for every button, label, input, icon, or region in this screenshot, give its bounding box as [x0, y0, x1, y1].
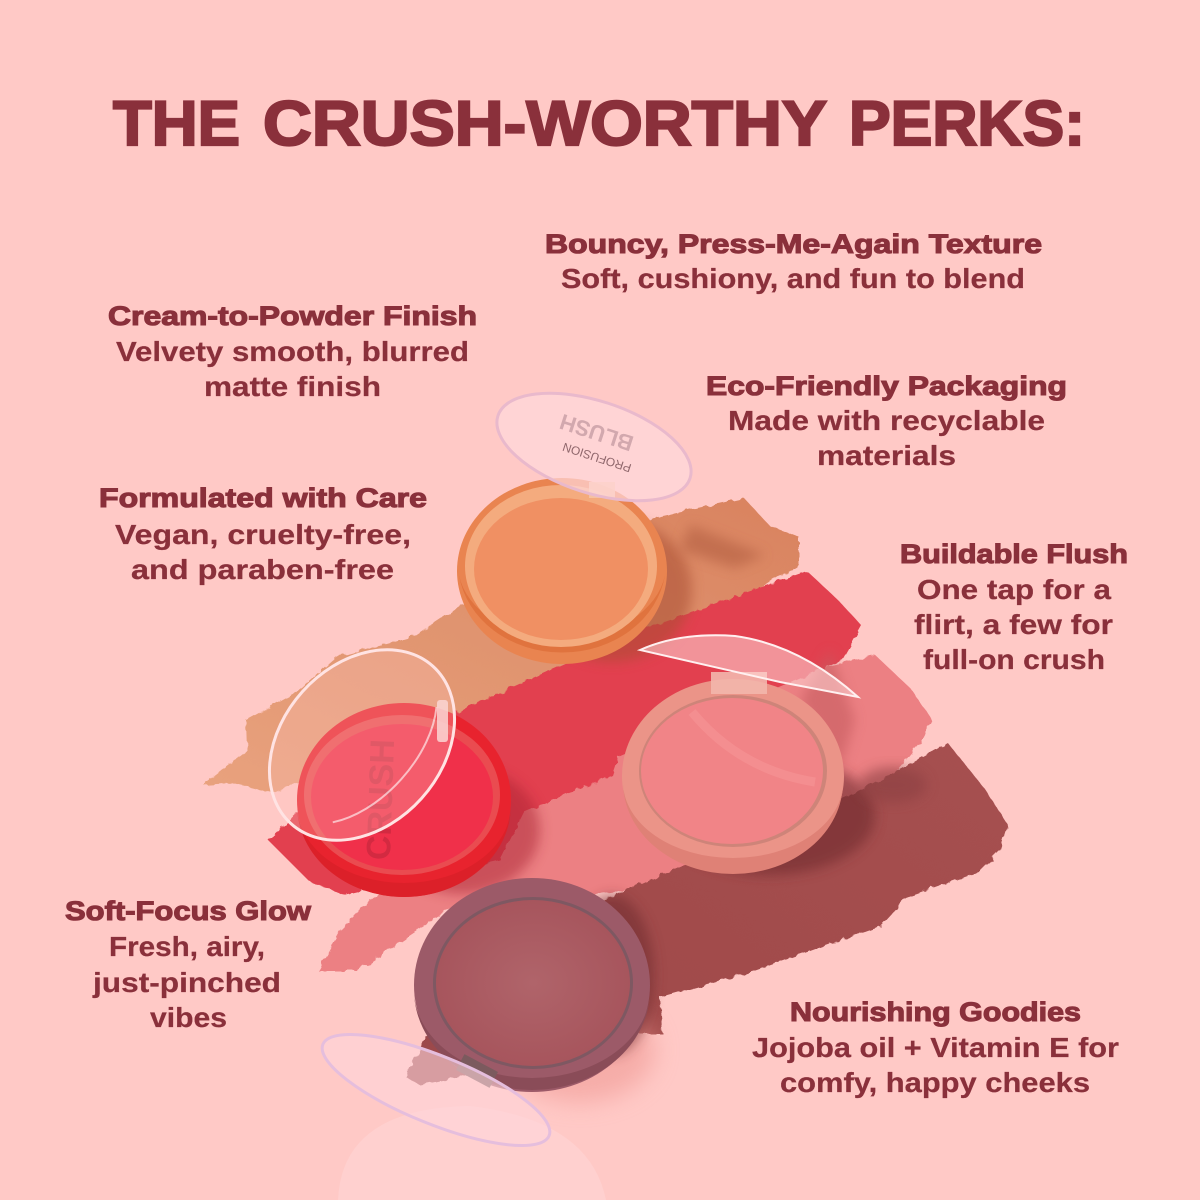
blush pan — [641, 698, 823, 844]
title: CRUSH-WORTHY — [263, 89, 827, 159]
perk: bouncy texture — [545, 229, 1042, 294]
blush pan — [474, 498, 648, 640]
perk: buildable flush: Buildable Flush — [900, 539, 1128, 569]
perk: soft-focus glow: just-pinched — [92, 967, 281, 998]
perk: buildable flush — [900, 539, 1128, 675]
compact: pink blush — [622, 635, 858, 874]
shadows under compacts — [384, 518, 927, 1102]
clear lid — [232, 613, 492, 877]
clear lid — [484, 372, 704, 522]
swatch: brown smear fragment — [406, 1036, 470, 1085]
perk: formulated with care — [99, 483, 427, 585]
hinge — [711, 672, 767, 694]
perk: buildable flush: One tap for a — [917, 574, 1112, 605]
swatch: brown smear — [597, 743, 1008, 1034]
perk: eco-friendly packaging: Made with recyclable — [728, 405, 1045, 436]
compact base — [297, 703, 511, 897]
perk: nourishing goodies: Jojoba oil + Vitamin E for — [752, 1032, 1119, 1063]
hinge — [589, 482, 615, 498]
swatch: tan smear — [203, 498, 799, 793]
title: PERKS: — [849, 89, 1085, 159]
perk: soft-focus glow: Fresh, airy, — [109, 931, 265, 962]
compact: red blush: CRUSH — [360, 739, 402, 861]
swatch: pink smear right edge — [760, 655, 932, 790]
perk: cream-to-powder finish: matte finish — [204, 371, 381, 402]
compact: brown blush — [414, 878, 650, 1092]
clear lid: BLUSH — [557, 409, 636, 456]
perk: nourishing goodies: comfy, happy cheeks — [780, 1067, 1090, 1098]
perk: formulated with care: Formulated with Care — [99, 483, 427, 513]
perk: formulated with care: Vegan, cruelty-free, — [115, 519, 411, 550]
perk: cream-to-powder finish: Velvety smooth, blurred — [116, 336, 469, 367]
perk: nourishing goodies: Nourishing Goodies — [790, 997, 1081, 1027]
compact: orange blush — [457, 372, 704, 664]
title — [113, 89, 1085, 159]
perk: soft-focus glow: Soft-Focus Glow — [65, 896, 312, 926]
title: THE — [113, 89, 240, 159]
perk: cream-to-powder finish: Cream-to-Powder Finish — [108, 301, 477, 331]
perk: buildable flush: flirt, a few for — [914, 609, 1113, 640]
compact base — [622, 679, 844, 873]
compact: red blush — [232, 613, 511, 897]
perk: eco-friendly packaging: materials — [817, 440, 956, 471]
lid reflection — [338, 1106, 606, 1200]
perk: eco-friendly packaging: Eco-Friendly Packaging — [706, 371, 1067, 401]
perk: cream-to-powder finish — [108, 301, 477, 402]
swatch: pink smear — [318, 655, 932, 971]
perk: eco-friendly packaging — [706, 371, 1067, 471]
perk: formulated with care: and paraben-free — [131, 554, 394, 585]
perk: soft-focus glow — [65, 896, 312, 1033]
blush pan — [436, 900, 630, 1066]
clear lid: PROFUSION — [561, 440, 633, 475]
compact: brown blush clear lid — [310, 1013, 562, 1167]
compact base — [414, 878, 650, 1092]
compact base — [457, 478, 667, 664]
perk: buildable flush: full-on crush — [923, 644, 1105, 675]
swatch: red smear — [268, 571, 862, 895]
hinge — [456, 1054, 498, 1088]
clear half lid — [640, 635, 858, 697]
blush pan — [311, 724, 493, 870]
perk: nourishing goodies — [752, 997, 1119, 1098]
perk: bouncy texture: Bouncy, Press-Me-Again Texture — [545, 229, 1042, 259]
perk: bouncy texture: Soft, cushiony, and fun to blend — [561, 263, 1025, 294]
perk: soft-focus glow: vibes — [150, 1002, 227, 1033]
lid hinge — [437, 700, 448, 742]
